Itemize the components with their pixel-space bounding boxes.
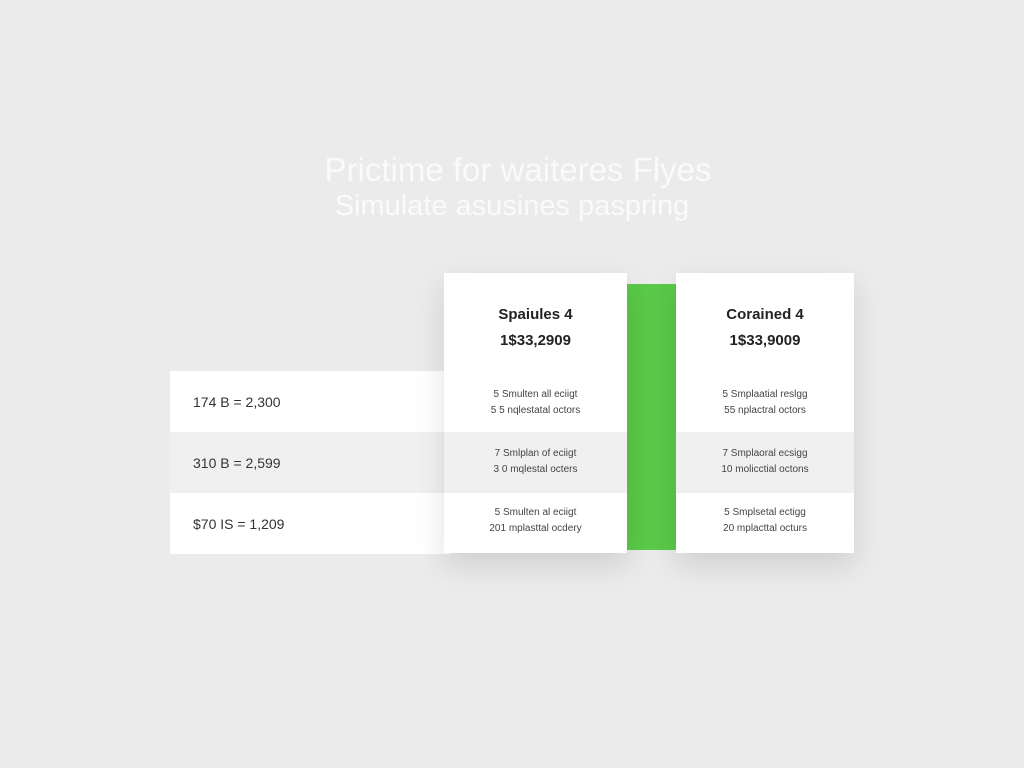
card 2 cells bbox=[722, 389, 808, 416]
card 2 cells: 55 nplactral octors bbox=[724, 405, 806, 416]
card 2 cells: 5 Smplaatial reslgg bbox=[722, 389, 808, 400]
card 2: 10 molicctial octons bbox=[721, 464, 809, 475]
row 1 bbox=[170, 371, 450, 432]
card 1: 201 mplasttal ocdery bbox=[489, 523, 582, 534]
card 1 cells: 5 Smulten all eciigt bbox=[494, 389, 577, 400]
card 2: 7 Smplaoral ecsigg bbox=[722, 448, 808, 459]
left row panel bbox=[170, 371, 450, 554]
card 1: 7 Smlplan of eciigt bbox=[495, 448, 576, 459]
card 1: 5 Smulten al eciigt bbox=[495, 507, 576, 518]
card 1 header: Spaiules 4 bbox=[498, 306, 573, 323]
card 1 bbox=[444, 273, 627, 553]
card 1 header: 1$33,2909 bbox=[500, 332, 571, 349]
card 2 header bbox=[726, 306, 804, 349]
card 2 header: 1$33,9009 bbox=[730, 332, 800, 349]
card 1 header bbox=[498, 306, 573, 349]
green bar bbox=[627, 284, 676, 550]
subtitle: Simulate asusines paspring bbox=[335, 190, 689, 222]
card 1 cells bbox=[491, 389, 580, 416]
row 1: 174 B = 2,300 bbox=[193, 394, 281, 410]
title: Prictime for waiteres Flyes bbox=[325, 151, 711, 188]
row 3: $70 IS = 1,209 bbox=[193, 516, 284, 532]
card 2 bbox=[676, 273, 854, 553]
row 2 bbox=[170, 432, 450, 493]
card 1: 3 0 mqlestal octers bbox=[494, 464, 577, 475]
card 1 cells: 5 5 nqlestatal octors bbox=[491, 405, 580, 416]
card 2: 20 mplacttal octurs bbox=[723, 523, 807, 534]
card 2 header: Corained 4 bbox=[726, 306, 804, 323]
card 2: 5 Smplsetal ectigg bbox=[724, 507, 806, 518]
row 3 bbox=[170, 493, 450, 554]
row 2: 310 B = 2,599 bbox=[193, 455, 281, 471]
